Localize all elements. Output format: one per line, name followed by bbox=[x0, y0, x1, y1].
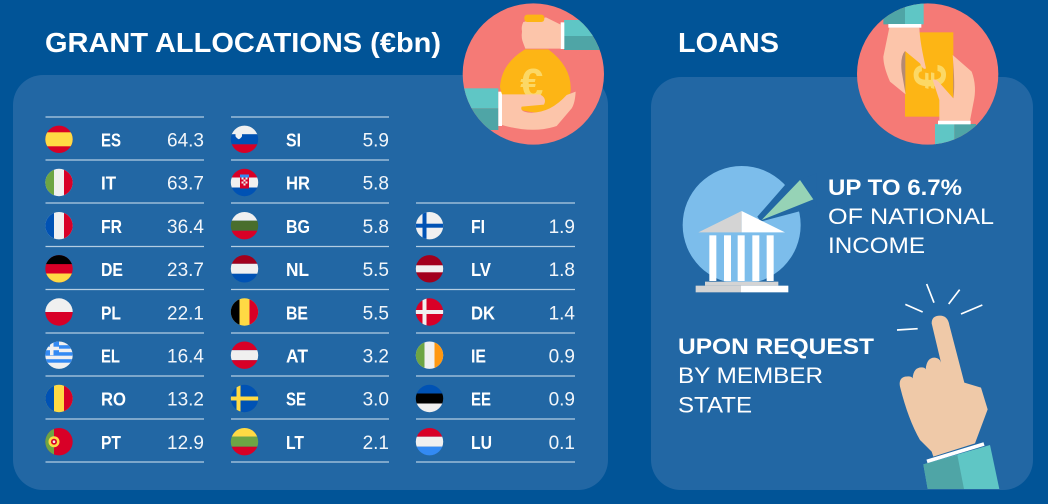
table: column 1: 12.9 bbox=[167, 433, 204, 454]
heading: loans: LOANS bbox=[678, 27, 779, 58]
text: up to 6.7% of national income: INCOME bbox=[828, 233, 925, 258]
flag: Lithuania bbox=[230, 428, 258, 456]
table: column 2: 3.0 bbox=[363, 390, 389, 410]
table: column 2 bbox=[230, 117, 389, 462]
panel: grant allocations bbox=[13, 75, 608, 490]
table: column 1: ES bbox=[101, 130, 121, 150]
table: column 1: 63.7 bbox=[167, 174, 204, 194]
table: column 3: LV bbox=[471, 260, 491, 280]
table: column 3: IE bbox=[471, 346, 486, 366]
table: column 3: FI bbox=[471, 217, 485, 237]
table: column 3: DK bbox=[471, 304, 495, 324]
table: column 1: 23.7 bbox=[167, 260, 204, 281]
table: column 3: 1.4 bbox=[549, 304, 575, 324]
flag: Italy bbox=[45, 168, 73, 196]
table: column 3: LU bbox=[471, 433, 492, 453]
table: column 2: LT bbox=[286, 433, 304, 453]
panel: loans bbox=[651, 77, 1033, 490]
table: column 2: BE bbox=[286, 304, 308, 324]
table: column 1 bbox=[45, 117, 204, 462]
table: column 2: NL bbox=[286, 260, 309, 280]
icon: pointing hand bbox=[897, 284, 999, 489]
flag: Estonia bbox=[416, 384, 444, 412]
table: column 1: IT bbox=[101, 174, 116, 194]
flag: Luxembourg bbox=[416, 428, 444, 456]
text: upon request by member state: BY MEMBER bbox=[678, 363, 823, 388]
flag: France bbox=[45, 212, 73, 240]
table: column 1: FR bbox=[101, 217, 122, 237]
flag: Slovenia bbox=[230, 125, 258, 153]
table: column 1: DE bbox=[101, 260, 123, 280]
flag: Denmark bbox=[416, 298, 444, 326]
flag: Netherlands bbox=[230, 255, 258, 283]
text: upon request by member state: STATE bbox=[678, 392, 752, 418]
table: column 2: BG bbox=[286, 217, 310, 237]
table: column 1: PL bbox=[101, 304, 121, 324]
table: column 2: 5.9 bbox=[363, 130, 389, 152]
text: up to 6.7% of national income: UP TO 6.7% bbox=[828, 175, 962, 200]
table: column 2: 5.8 bbox=[363, 174, 389, 194]
table: column 3: 1.8 bbox=[549, 260, 575, 281]
flag: Finland bbox=[416, 212, 444, 240]
table: column 2: HR bbox=[286, 174, 310, 194]
table: column 1: RO bbox=[101, 390, 126, 410]
table: column 1: PT bbox=[101, 433, 121, 453]
table: column 2: 3.2 bbox=[363, 346, 389, 368]
table: column 2: SE bbox=[286, 390, 306, 410]
table: column 3: 1.9 bbox=[549, 217, 575, 238]
heading: grant allocations: GRANT ALLOCATIONS (€bn) bbox=[45, 27, 441, 58]
text: up to 6.7% of national income: OF NATIONAL bbox=[828, 204, 994, 229]
flag: Romania bbox=[45, 384, 73, 412]
table: column 2: AT bbox=[286, 346, 308, 366]
icon: money bag handed over: € bbox=[520, 60, 543, 107]
table: column 3: 0.1 bbox=[549, 433, 575, 454]
flag: Belgium bbox=[230, 298, 258, 326]
table: column 2: 2.1 bbox=[363, 433, 389, 454]
table: column 1: 16.4 bbox=[167, 346, 204, 368]
table: column 2: SI bbox=[286, 130, 301, 150]
text: upon request by member state bbox=[678, 334, 875, 418]
icon: money bag handed over bbox=[460, 3, 604, 145]
table: column 2: 5.5 bbox=[363, 260, 389, 281]
table: column 3: 0.9 bbox=[549, 390, 575, 410]
flag: Poland bbox=[45, 298, 73, 326]
flag: Croatia bbox=[230, 168, 258, 196]
table: column 1: 64.3 bbox=[167, 130, 204, 152]
flag: Latvia bbox=[416, 255, 444, 283]
flag: Spain bbox=[45, 125, 73, 153]
flag: Greece bbox=[45, 341, 73, 369]
icon: hands exchanging a banknote: € bbox=[905, 64, 956, 89]
table: column 3: EE bbox=[471, 390, 491, 410]
table: column 2: 5.5 bbox=[363, 304, 389, 324]
flag: Austria bbox=[230, 341, 258, 369]
icon: hands exchanging a banknote bbox=[857, 2, 998, 147]
text: upon request by member state: UPON REQUEST bbox=[678, 334, 875, 359]
flag: Ireland bbox=[416, 341, 444, 369]
table: column 1: 22.1 bbox=[167, 304, 204, 324]
flag: Sweden bbox=[230, 384, 258, 412]
flag: Germany bbox=[45, 255, 73, 283]
flag: Bulgaria bbox=[230, 212, 258, 240]
flag: Portugal bbox=[45, 428, 73, 456]
table: column 3: 0.9 bbox=[549, 346, 575, 368]
table: column 2: 5.8 bbox=[363, 217, 389, 238]
table: column 1: 13.2 bbox=[167, 390, 204, 410]
table: column 1: 36.4 bbox=[167, 217, 204, 238]
text: up to 6.7% of national income bbox=[828, 175, 994, 258]
icon: bank with pie chart bbox=[683, 166, 817, 292]
table: column 3 bbox=[416, 203, 575, 462]
table: column 1: EL bbox=[101, 346, 120, 366]
